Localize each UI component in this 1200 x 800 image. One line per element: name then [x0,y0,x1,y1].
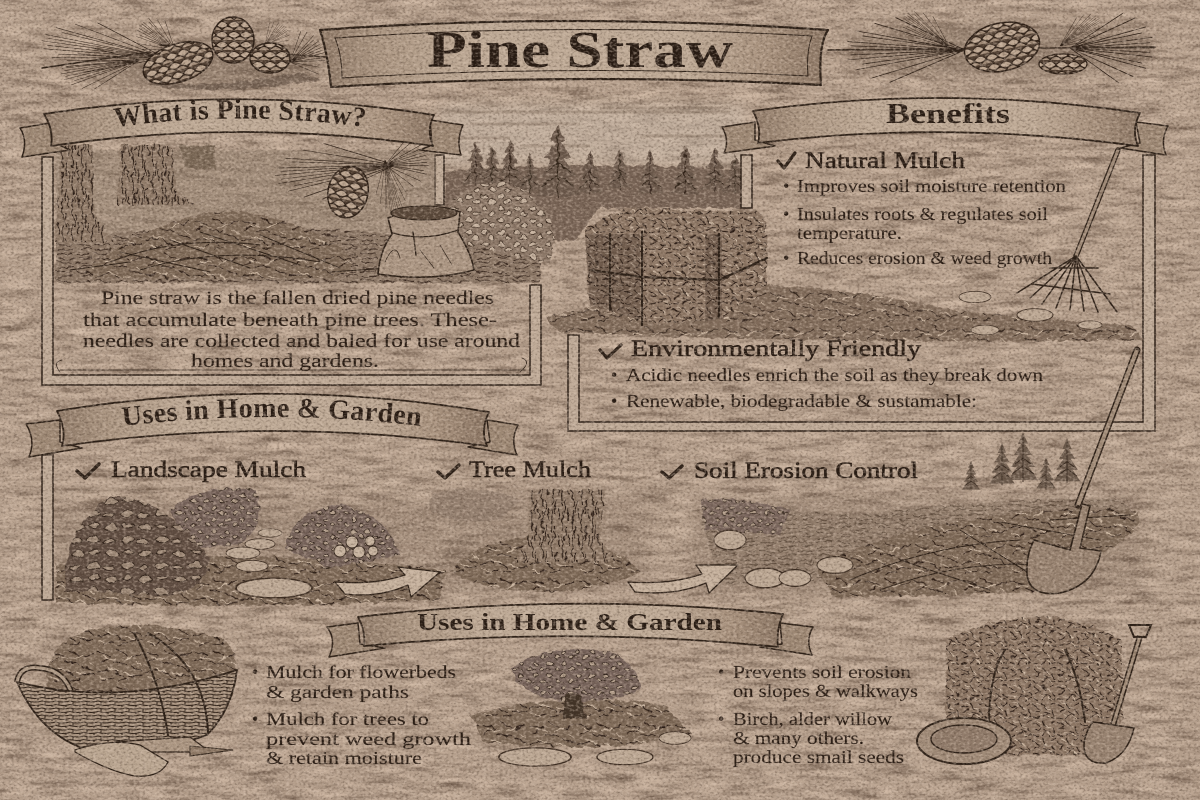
description text: homes and gardens. [191,352,379,372]
title banner [320,21,828,87]
decoration: pine sprig top left [39,10,332,94]
ribbon heading: Uses in Home & Garden [417,610,722,636]
environmentally friendly list: • [611,365,617,385]
natural mulch list: temperature. [797,223,902,243]
panel: lower uses section [17,604,1151,776]
natural mulch list: Improves soil moisture retention [797,176,1066,196]
straw bale with coil and shovel [917,617,1151,764]
fir trees [962,432,1080,491]
environmentally friendly list [600,336,1043,411]
left bullet list: & garden paths [266,682,409,702]
loose needles [70,232,390,272]
panel: Uses in Home and Garden scenes [25,346,1142,607]
ribbon [327,604,813,657]
check icon [438,465,459,478]
check icon [600,345,621,358]
flowers [334,536,378,558]
hose coil [917,718,1011,764]
sky with clouds [440,105,745,165]
ribbon [19,98,464,158]
right bullet list: • [718,662,724,682]
right bullet list: produce smail seeds [733,747,904,767]
tree with mulch ring [430,489,642,592]
shovel [1027,350,1137,594]
right bullet list [718,662,918,767]
soil erosion control item: Soil Erosion Control [694,458,918,483]
right bullet list: on slopes & walkways [733,681,918,701]
right bullet list: & many others. [733,728,864,748]
decoration: pine sprig top right [828,3,1155,83]
title text: Pine Straw [427,22,734,79]
panel frame [568,155,1155,431]
straw mound [85,212,353,278]
tree line [445,124,747,240]
natural mulch list: • [783,204,789,224]
bale side [722,222,767,318]
environmentally friendly list: Renewable, biodegradable & sustamable: [626,391,977,411]
garden gloves and tool [75,737,233,776]
bale top [585,208,767,236]
arrow two [628,565,738,593]
landscape mulch item: Landscape Mulch [111,457,307,482]
natural mulch list: Insulates roots & regulates soil [797,204,1048,224]
panel frame [42,155,541,385]
tree mulch item: Tree Mulch [469,457,592,482]
illustration: central forest landscape [440,105,747,265]
ribbon [25,392,519,458]
right bullet list: • [718,709,724,729]
basket of pine straw [17,626,237,776]
left bullet list [252,662,471,768]
environmentally friendly list: Acidic needles enrich the soil as they break down [626,365,1043,385]
left bullet list: • [252,662,258,682]
left bullet list: Mulch for flowerbeds [266,662,456,682]
shrubs [448,183,555,265]
description text: Pine straw is the fallen dried pine needles [101,289,494,309]
description text: needles are collected and baled for use around [83,332,521,352]
rocks [714,530,853,588]
left bullet list: • [252,709,258,729]
description text [83,289,521,372]
forest scene [55,145,540,283]
inner rule and flourishes [56,358,527,372]
garden scene [56,488,445,606]
pine cones [138,17,290,92]
natural mulch list: Natural Mulch [805,148,966,173]
ribbon heading: Benefits [886,98,1010,130]
left bullet list: prevent weed growth [266,729,471,749]
hand shovel [1084,625,1151,763]
straw bale [545,208,1145,341]
description text: that accumulate beneath pine trees. These- [83,311,497,331]
natural mulch list [778,148,1066,268]
loose needles on slope [850,515,1130,590]
panel: Benefits [545,98,1168,431]
rake [1017,150,1118,312]
check icon [77,464,99,478]
panel: What is Pine Straw [19,98,542,386]
centre shrub with mulch and stones [470,649,692,766]
left bullet list: & retain moisture [266,748,422,768]
environmentally friendly list: Environmentally Friendly [631,336,922,361]
scene haze [60,490,1140,600]
right bullet list: Birch, alder willow [733,709,892,729]
erosion slope [700,498,1140,598]
natural mulch list: • [783,176,789,196]
environmentally friendly list: • [611,391,617,411]
bale ropes [590,232,767,325]
left bullet list: Mulch for trees to [266,709,429,729]
check icon [778,153,795,168]
pine cones [960,16,1087,78]
tree trunks [55,145,115,242]
rocks [959,291,1102,335]
ribbon heading: What is Pine Straw? [113,100,365,126]
frame post [42,455,53,600]
ribbon heading: Uses in Home & Garden [122,398,420,426]
ribbon [722,98,1168,155]
check icon [662,466,682,478]
bale front [585,234,722,326]
bale shading [585,234,722,322]
stepping stones [226,529,312,598]
natural mulch list: • [783,248,789,268]
pine branch and cone [273,134,432,222]
sack of needles [378,206,474,277]
tree mulch item [438,457,592,482]
right bullet list: Prevents soil erosion [733,662,911,682]
natural mulch list: Reduces erosion & weed growth [797,248,1052,268]
arrow one [335,567,440,597]
